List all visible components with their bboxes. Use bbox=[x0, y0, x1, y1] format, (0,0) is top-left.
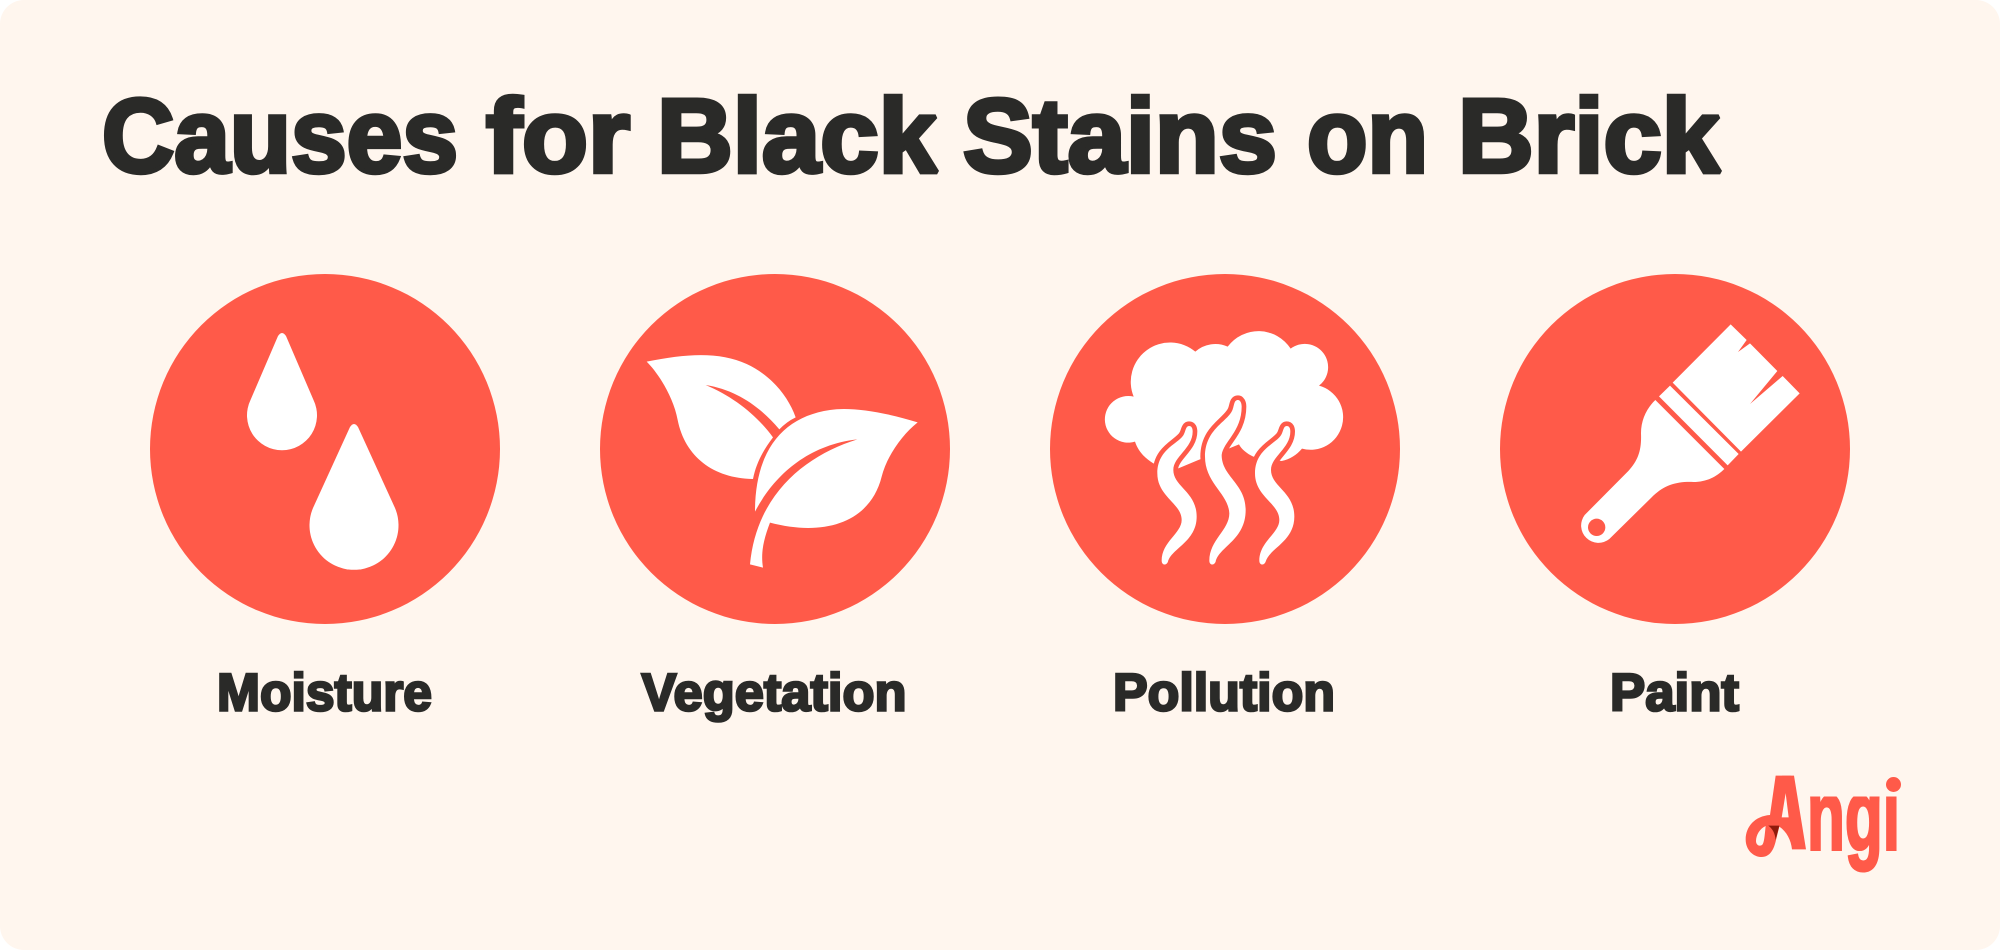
logo: Angi bbox=[1746, 776, 1901, 872]
panel: moisture bbox=[150, 274, 500, 723]
title: Stains bbox=[963, 78, 1277, 195]
label: paint: Paint bbox=[1610, 664, 1739, 723]
logo: i dot bbox=[1886, 777, 1901, 792]
icon circle: moisture bbox=[150, 274, 500, 624]
title: on bbox=[1307, 78, 1428, 195]
icon: smoke cloud bbox=[1105, 331, 1343, 565]
panel: paint bbox=[1500, 274, 1850, 723]
title: Brick bbox=[1458, 78, 1721, 195]
logo mark: A body and swoop bbox=[1746, 776, 1806, 857]
icon circle: paint bbox=[1500, 274, 1850, 624]
icon: leaves bbox=[647, 355, 918, 568]
panel: vegetation bbox=[600, 274, 950, 723]
panel: pollution bbox=[1050, 274, 1400, 723]
title: Black bbox=[657, 78, 938, 195]
title: for bbox=[486, 78, 630, 195]
label: pollution: Pollution bbox=[1113, 664, 1335, 723]
icon circle: vegetation bbox=[600, 274, 950, 624]
icon: paint brush bbox=[1581, 324, 1800, 543]
icon circle: pollution bbox=[1050, 274, 1400, 624]
label: moisture: Moisture bbox=[217, 664, 432, 723]
logo letters ngi: ngi bbox=[1807, 760, 1900, 872]
icon: water drops bbox=[247, 333, 398, 570]
title bbox=[102, 78, 1721, 195]
title: Causes bbox=[102, 78, 458, 195]
label: vegetation: Vegetation bbox=[642, 664, 906, 723]
logo: Angi: A bbox=[1768, 752, 1805, 872]
